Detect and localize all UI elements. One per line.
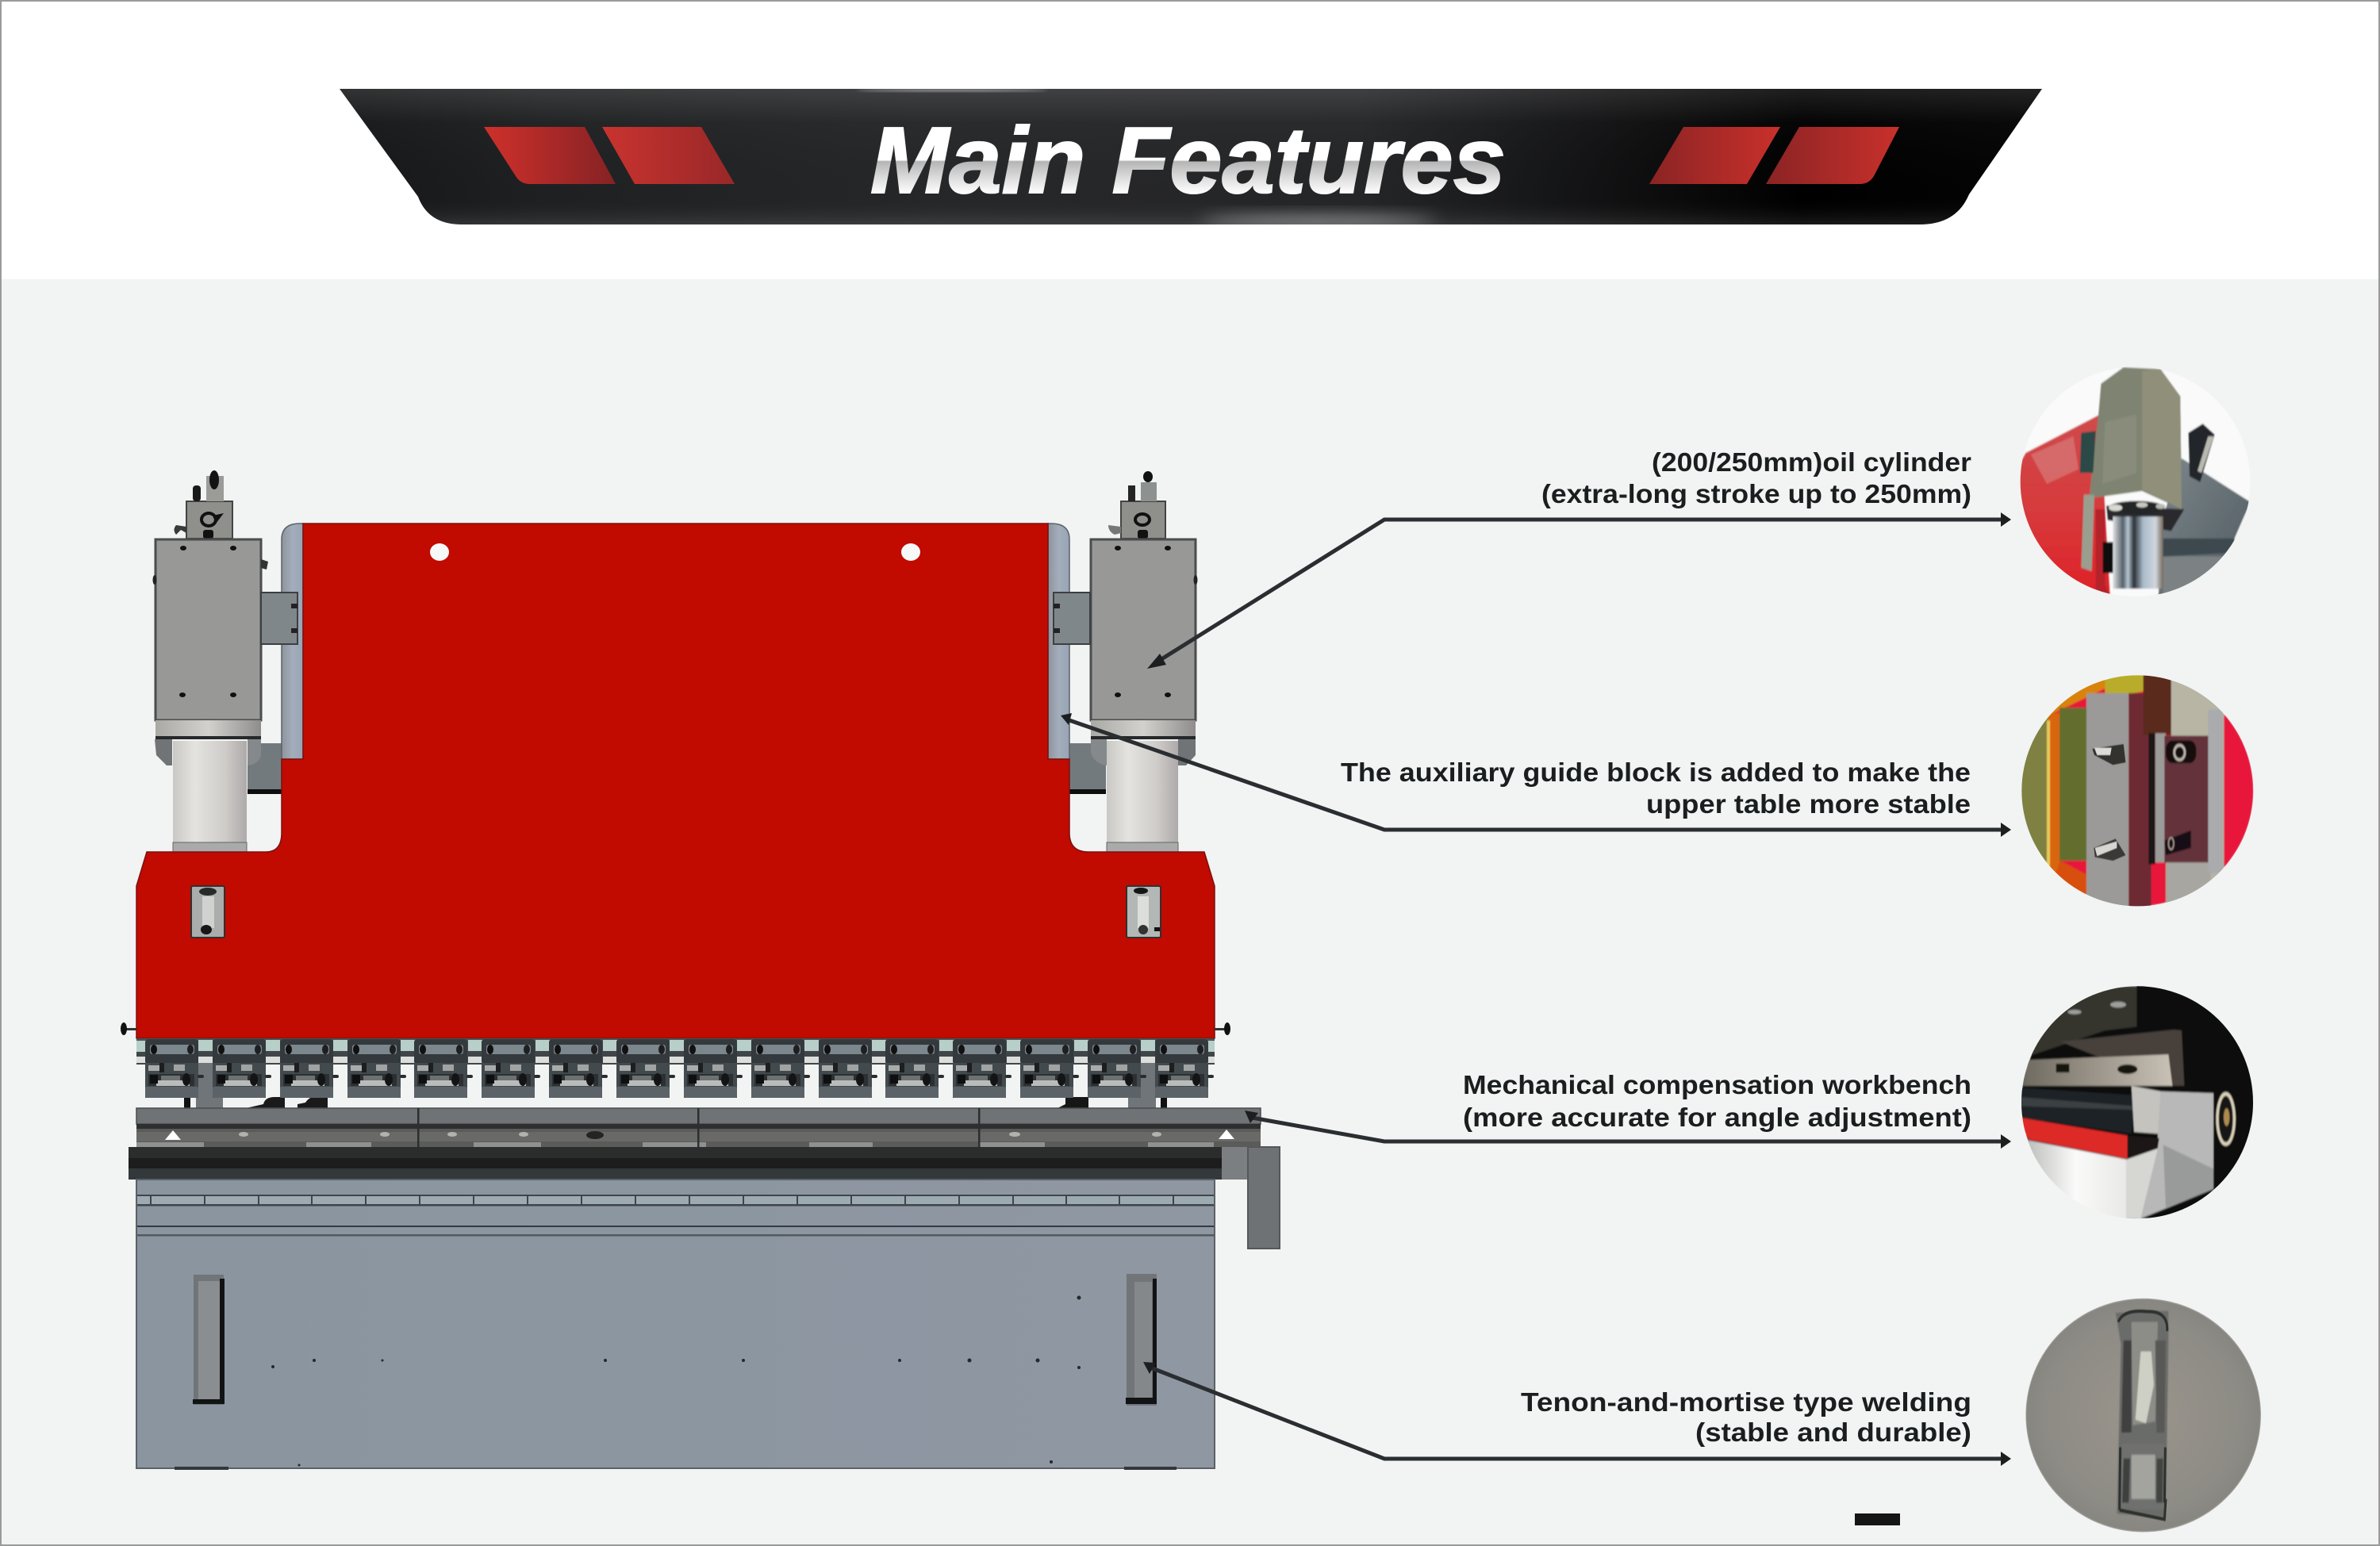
- label: guide block: The auxiliary guide block is added to make the: [1341, 758, 1971, 787]
- re-drawn brackets over the guides: [261, 593, 1090, 644]
- small black mark: [1855, 1513, 1900, 1525]
- mounting dots: [271, 1296, 1081, 1466]
- mechanical compensation workbench: [136, 1108, 1261, 1148]
- rail row: [137, 1195, 1214, 1206]
- label: oil cylinder: [1541, 447, 1971, 508]
- collar: [155, 720, 261, 765]
- left slot: [193, 1275, 225, 1405]
- cylinder block: [152, 539, 268, 720]
- label: oil cylinder: (200/250mm)oil cylinder: [1652, 447, 1971, 477]
- tool clamp support strip: [136, 1038, 1215, 1065]
- cylinder block: [1091, 539, 1198, 720]
- valve block: [1108, 471, 1165, 539]
- banner plate: [340, 89, 2042, 224]
- collar: [1091, 720, 1196, 765]
- piston rod: [1107, 741, 1178, 852]
- label: guide block: [1341, 758, 1971, 819]
- body seam lines: [137, 1226, 1214, 1236]
- right cylinder assembly: [1054, 471, 1198, 852]
- wedge slots: [239, 1132, 1161, 1137]
- detail photo: oil cylinder: [2015, 366, 2251, 604]
- right clamp window: [1127, 886, 1161, 938]
- lower machine body: [136, 1180, 1215, 1470]
- guide strips: [282, 524, 1069, 759]
- arrow: oil cylinder: [1147, 512, 2011, 669]
- label: guide block: upper table more stable: [1646, 789, 1971, 819]
- label: workbench: (more accurate for angle adjustment): [1463, 1103, 1971, 1132]
- left red accents: [484, 127, 735, 184]
- lower block: [248, 743, 282, 794]
- side arm: [1222, 1147, 1280, 1249]
- side stops: [121, 1022, 1230, 1035]
- red upper beam: [136, 524, 1215, 1038]
- right red accents: [1649, 127, 1899, 184]
- label: workbench: Mechanical compensation workbench: [1463, 1070, 1971, 1099]
- adjustment screws: [165, 1130, 1234, 1140]
- label: welding: (stable and durable): [1695, 1417, 1971, 1447]
- label: welding: [1521, 1387, 1971, 1447]
- callout text: [1341, 447, 1971, 1447]
- label: welding: Tenon-and-mortise type welding: [1521, 1387, 1971, 1417]
- vertical posts: [184, 1063, 1167, 1108]
- left cylinder assembly: [152, 470, 298, 852]
- arrow: workbench: [1245, 1111, 2011, 1149]
- beam holes: [430, 543, 920, 561]
- lower block: [1068, 743, 1106, 794]
- segment dividers: [417, 1108, 981, 1147]
- feet: [175, 1467, 1177, 1470]
- black die bar: [129, 1147, 1222, 1180]
- detail photo: welding: [2025, 1299, 2261, 1533]
- weld bead: [2118, 1311, 2167, 1519]
- detail photo: workbench: [2017, 983, 2259, 1226]
- wedge plates: [136, 1142, 1214, 1148]
- label: workbench: [1463, 1070, 1971, 1132]
- arrow: welding: [1143, 1362, 2011, 1466]
- press brake machine: [121, 470, 1280, 1470]
- title banner: [340, 89, 2042, 224]
- label: oil cylinder: (extra-long stroke up to 250mm): [1541, 479, 1971, 508]
- piston rod: [173, 741, 247, 852]
- bolts: [2092, 744, 2125, 861]
- bracket: [261, 593, 298, 644]
- valve block: [175, 470, 232, 539]
- tool clamps row: [145, 1039, 1214, 1098]
- bracket: [1054, 593, 1090, 644]
- detail photo: guide block: [2015, 669, 2253, 910]
- banner sheen: [340, 89, 2042, 224]
- left clamp window: [191, 886, 225, 938]
- callout arrows: [1061, 512, 2011, 1466]
- right slot: [1126, 1274, 1157, 1406]
- arrow: guide block: [1061, 713, 2011, 837]
- title text: Main Features: [870, 108, 1506, 213]
